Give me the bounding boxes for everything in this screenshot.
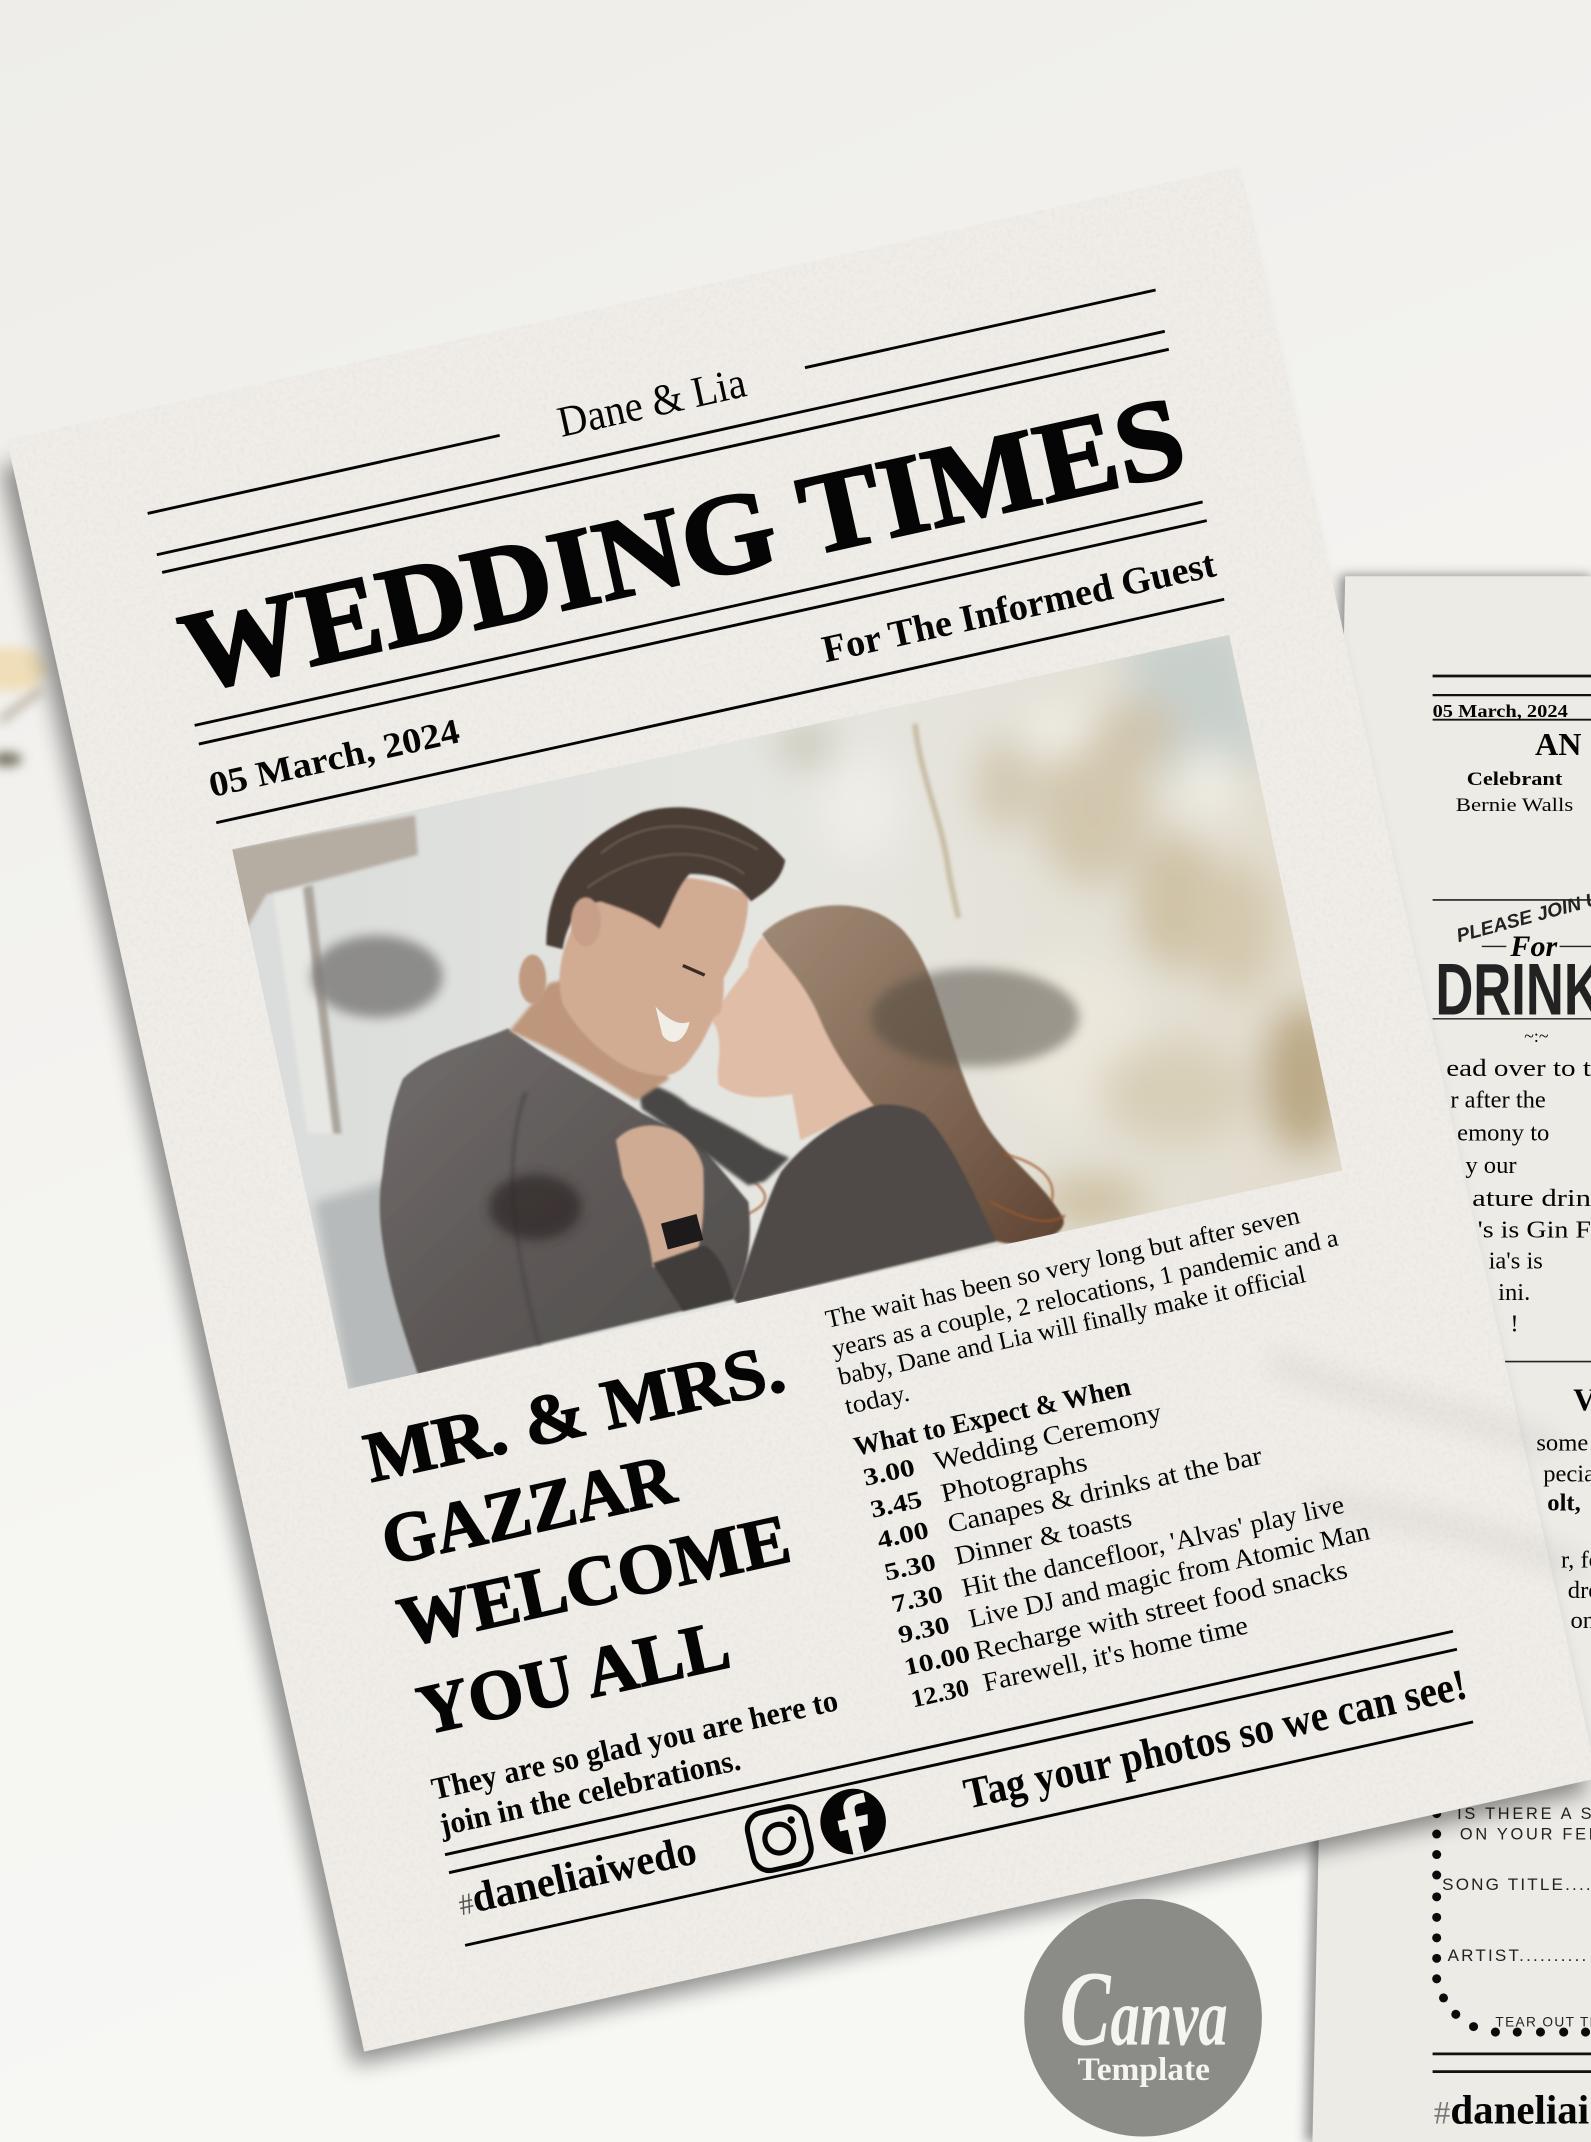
song request tear-out	[1432, 1805, 1591, 2037]
man's hair highlights	[587, 826, 758, 888]
welcome sentence: They are so glad you are here to	[428, 1683, 841, 1807]
dark blotch	[489, 1174, 582, 1240]
headline	[355, 1329, 847, 1750]
blurred tree bokeh	[776, 615, 1345, 1229]
man's hair	[546, 807, 785, 949]
schedule: Recharge with street food snacks	[972, 1554, 1350, 1666]
photo call to action: Tag your photos so we can see!	[960, 1660, 1471, 1818]
schedule: 10.00	[902, 1641, 973, 1681]
back sheet footer rules	[1433, 2054, 1591, 2072]
drinks body text: ature drin	[1472, 1185, 1591, 1212]
back sheet heading: AN	[1535, 727, 1582, 762]
tree trunk streak	[915, 724, 959, 918]
drinks banner	[1433, 888, 1591, 1046]
man's smile	[656, 1006, 690, 1042]
icon: facebook	[814, 1782, 892, 1861]
schedule: 5.30	[882, 1549, 938, 1586]
schedule: 3.00	[861, 1454, 917, 1492]
back sheet hashtag: #daneliai	[1434, 2087, 1589, 2133]
welcome sentence: join in the celebrations.	[435, 1742, 744, 1843]
celebrant: Celebrant	[1467, 769, 1563, 790]
schedule: 3.45	[868, 1486, 924, 1524]
woman's hair	[762, 905, 1064, 1244]
second section of back sheet: olt,	[1547, 1489, 1581, 1516]
schedule: Photographs	[938, 1447, 1090, 1508]
schedule: Hit the dancefloor, 'Alvas' play live	[959, 1489, 1347, 1603]
woman's hugging sleeve	[653, 1245, 733, 1311]
second section of back sheet	[1433, 1362, 1591, 1634]
orange hair strands	[744, 1154, 1065, 1221]
man's sweater	[380, 1028, 750, 1374]
schedule: Farewell, it's home time	[980, 1610, 1250, 1697]
intro paragraph	[823, 1194, 1353, 1420]
soft leaf shadows on the sheet	[1270, 1359, 1584, 1570]
title: WEDDING TIMES	[169, 372, 1196, 717]
badge label: Template	[1078, 2052, 1210, 2088]
icon: instagram	[744, 1804, 814, 1874]
headline: GAZZAR	[374, 1440, 683, 1581]
blurred flower at left edge	[0, 647, 46, 766]
drinks body text: ead over to t	[1446, 1055, 1591, 1082]
man's neck	[509, 970, 669, 1101]
schedule: 7.30	[889, 1581, 945, 1618]
schedule: 4.00	[875, 1517, 931, 1554]
man's face	[560, 877, 748, 1076]
tagline: For The Informed Guest	[818, 543, 1220, 671]
shadow blob	[311, 935, 442, 1017]
song request tear-out: ARTIST..........	[1448, 1946, 1588, 1965]
man's eye	[683, 966, 705, 975]
man's fist and forearm	[616, 1125, 704, 1267]
man's hand on neck	[519, 955, 546, 1004]
names: Dane & Lia	[553, 359, 750, 447]
schedule: Wedding Ceremony	[931, 1396, 1165, 1476]
building at left	[225, 815, 437, 1393]
intro paragraph: baby, Dane and Lia will finally make it official	[836, 1260, 1308, 1391]
date: 05 March, 2024	[205, 711, 463, 805]
man's dark inner sleeve	[636, 1079, 789, 1185]
second shadow blob	[871, 968, 1079, 1067]
second section of back sheet: some	[1536, 1429, 1588, 1456]
panel: back sheet	[1306, 575, 1591, 2142]
back sheet header rules	[1433, 676, 1591, 720]
drinks body text: ia's is	[1489, 1248, 1543, 1275]
schedule	[859, 1358, 1386, 1713]
back sheet date: 05 March, 2024	[1433, 701, 1568, 721]
hashtag: #daneliaiwedo	[453, 1827, 701, 1925]
drinks body text: 's is Gin F	[1478, 1216, 1591, 1243]
drinks body text: y our	[1465, 1152, 1517, 1179]
drinks body text: emony to	[1457, 1119, 1549, 1146]
sweater sleeve crease	[513, 1093, 539, 1345]
schedule heading: What to Expect & When	[851, 1371, 1133, 1462]
footer rules	[445, 1631, 1473, 1945]
headline: MR. & MRS.	[357, 1329, 792, 1498]
man's ear	[571, 897, 601, 946]
celebrant: Bernie Walls	[1456, 795, 1573, 816]
song request tear-out: SONG TITLE....	[1442, 1875, 1591, 1894]
drinks body text	[1446, 1055, 1591, 1337]
woman's sweater	[733, 1105, 997, 1304]
drinks body text: r after the	[1450, 1087, 1546, 1114]
song request tear-out: IS THERE A S	[1457, 1805, 1591, 1823]
masthead rules	[148, 290, 1224, 823]
drinks banner: For	[1509, 930, 1557, 963]
intro paragraph: today.	[842, 1379, 912, 1420]
schedule: 12.30	[909, 1674, 972, 1713]
drinks body text: ini.	[1498, 1279, 1530, 1306]
schedule: Canapes & drinks at the bar	[945, 1440, 1265, 1539]
intro paragraph: The wait has been so very long but after seven	[823, 1201, 1303, 1334]
watch	[661, 1214, 703, 1250]
celebrant	[1456, 769, 1573, 816]
drinks banner: ~:~	[1524, 1026, 1549, 1046]
photo: couple	[219, 615, 1352, 1393]
schedule: Live DJ and magic from Atomic Man	[966, 1515, 1372, 1633]
headline: WELCOME	[391, 1500, 797, 1662]
woman's face	[713, 937, 874, 1140]
schedule: Dinner & toasts	[952, 1502, 1134, 1571]
schedule: 9.30	[896, 1612, 952, 1649]
headline: YOU ALL	[411, 1606, 737, 1750]
intro paragraph: years as a couple, 2 relocations, 1 pandemic and a	[829, 1224, 1341, 1363]
badge wordmark: Canva	[1060, 1950, 1228, 2068]
drinks body text: !	[1510, 1310, 1519, 1337]
Canva Template badge	[1024, 1899, 1262, 2137]
